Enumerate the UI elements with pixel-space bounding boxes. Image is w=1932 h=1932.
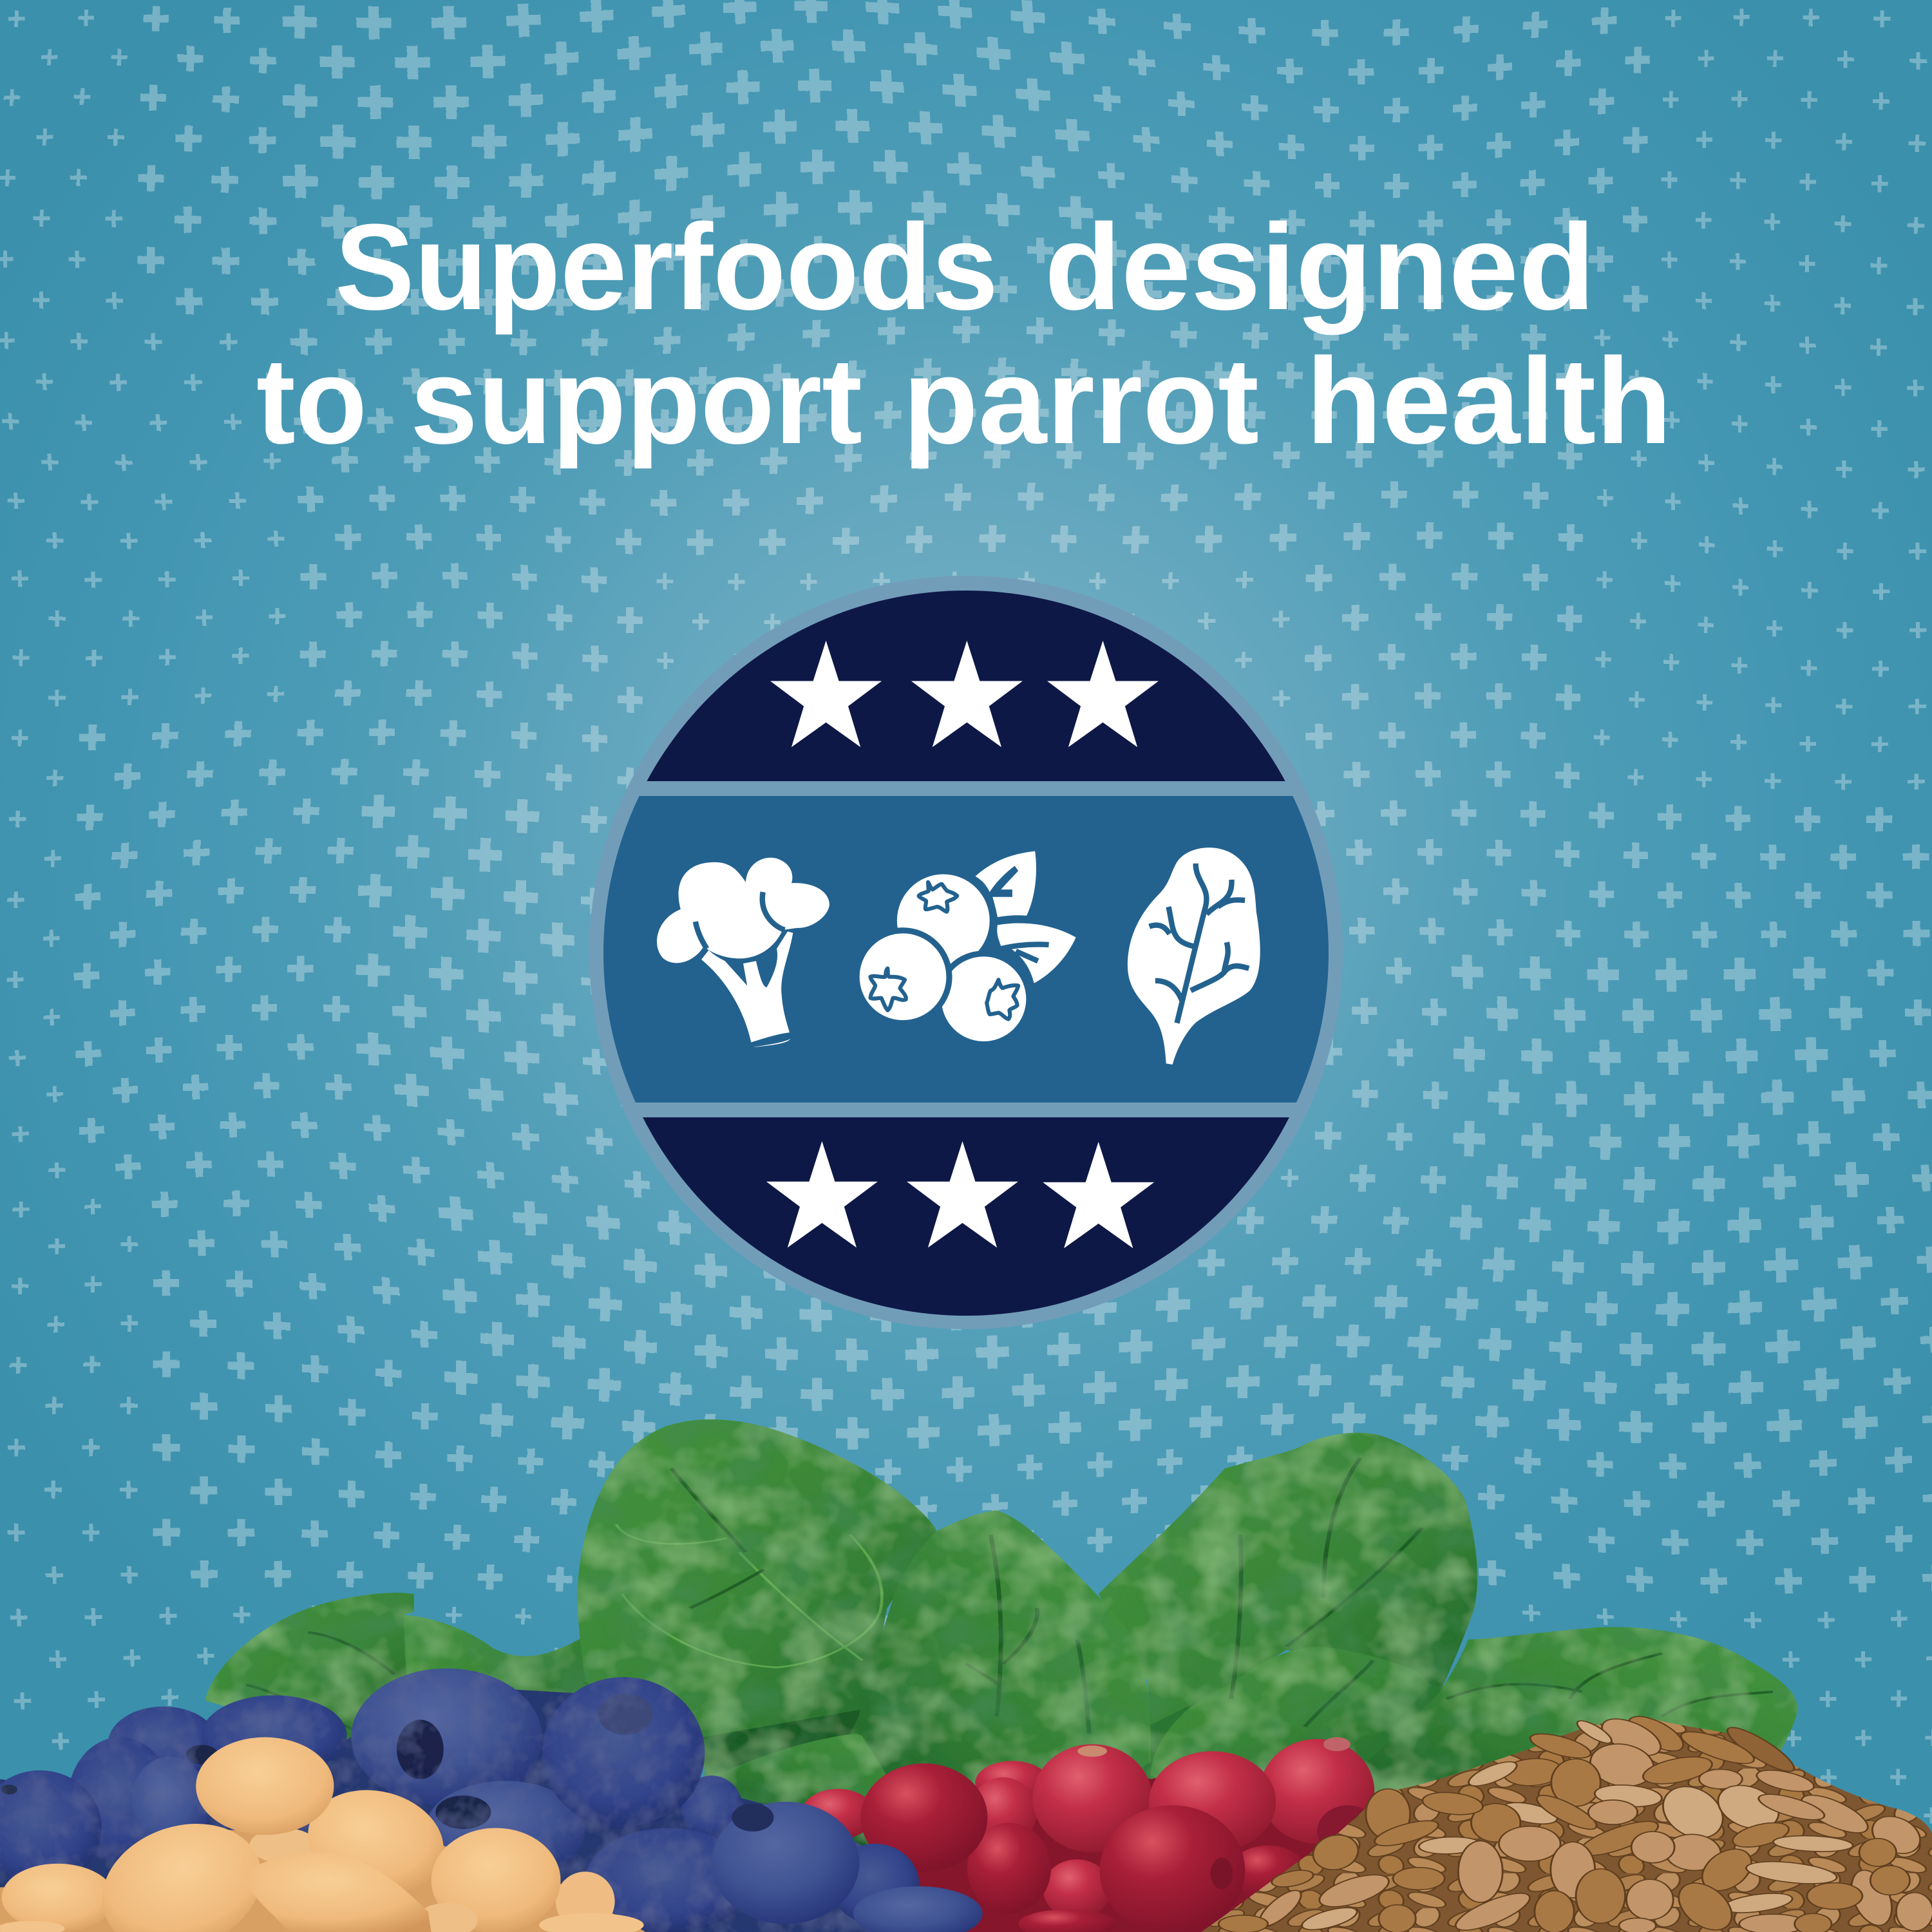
flax seed pile <box>1200 1711 1932 1932</box>
title <box>256 199 1672 469</box>
peanuts and front blueberries <box>0 1738 983 1932</box>
title: Superfoods <box>335 199 998 336</box>
icon: blueberries <box>857 851 1076 1045</box>
title: support <box>410 333 862 469</box>
title: health <box>1306 333 1672 469</box>
title: designed <box>1045 199 1595 336</box>
blueberries <box>0 1669 966 1932</box>
left leaf group <box>205 1419 966 1846</box>
title: parrot <box>903 333 1259 469</box>
bottom stars <box>766 1141 1154 1248</box>
icon: broccoli <box>657 858 829 1047</box>
icon: spinach leaf <box>1128 848 1260 1065</box>
cranberries <box>801 1738 1379 1932</box>
top stars <box>770 641 1159 747</box>
badge <box>580 576 1352 1330</box>
center and right leaf group <box>857 1433 1797 1856</box>
title: to <box>256 333 367 469</box>
spinach leaves <box>205 1419 1797 1856</box>
